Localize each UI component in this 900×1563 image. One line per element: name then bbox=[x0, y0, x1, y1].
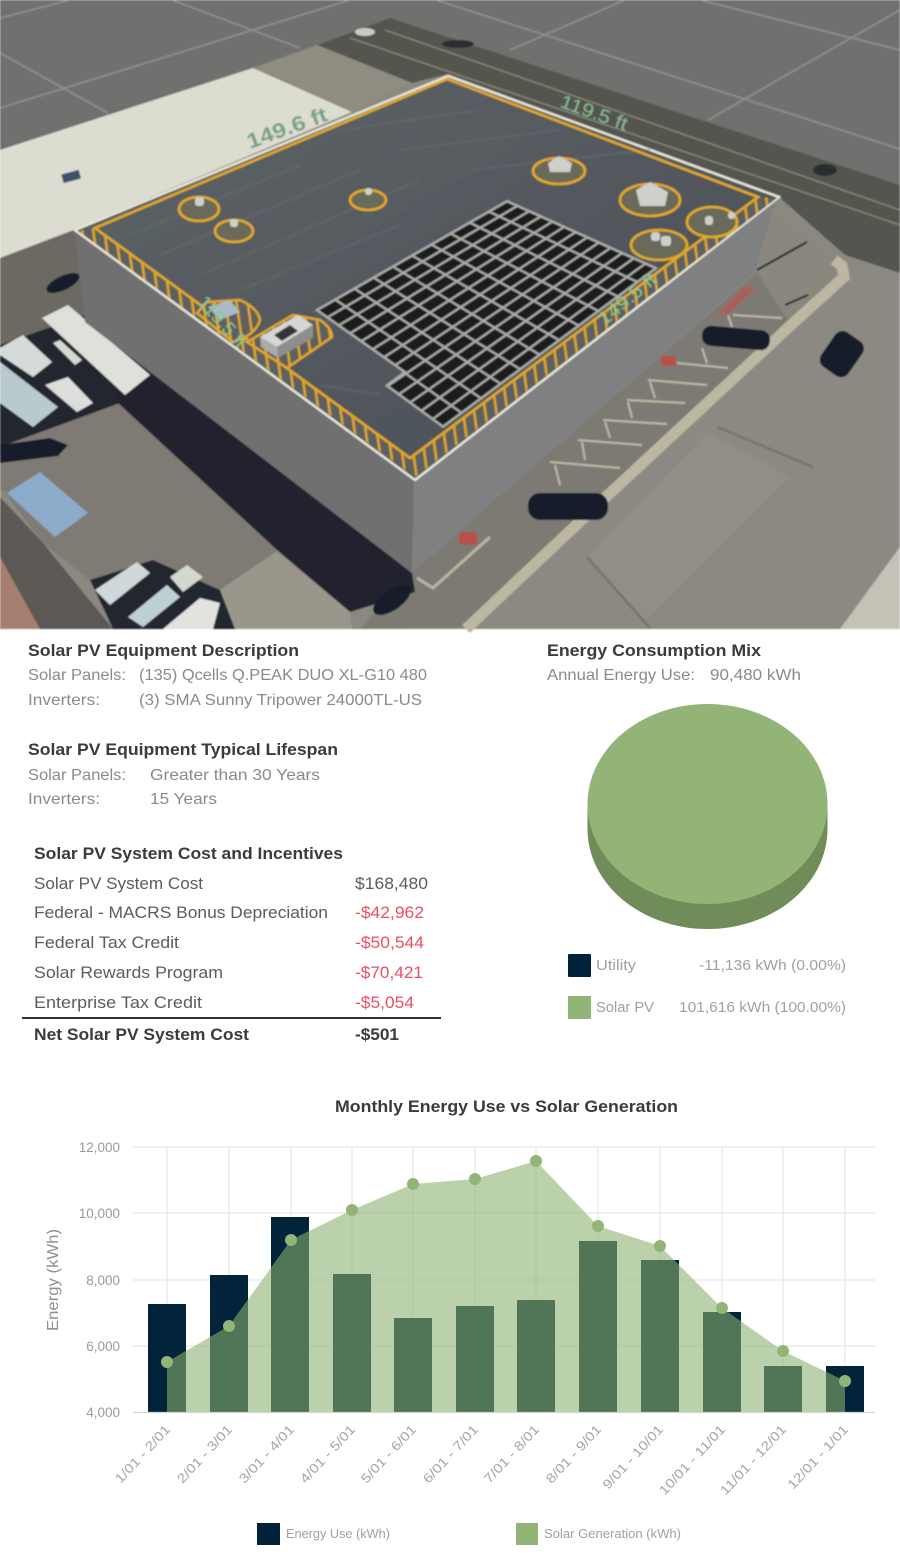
cost table: -$70,421 bbox=[355, 964, 423, 982]
x axis labels: 1/01 - 2/01 bbox=[112, 1422, 173, 1486]
ground base bbox=[0, 0, 900, 629]
equipment description rows bbox=[28, 667, 427, 709]
x axis labels bbox=[112, 1422, 851, 1498]
cost table: -$50,544 bbox=[355, 934, 424, 952]
red marks bbox=[717, 287, 757, 315]
solar panel array bbox=[296, 200, 658, 428]
roof setback hatch bbox=[78, 197, 777, 477]
pavement seams bbox=[587, 427, 813, 628]
roof dimension labels: 119.5 ft bbox=[193, 292, 251, 353]
light poles bbox=[757, 242, 808, 305]
street bbox=[317, 18, 900, 273]
heading: typical lifespan: Solar PV Equipment Typical Lifespan bbox=[28, 741, 338, 759]
lower right concrete bbox=[415, 225, 900, 629]
cost table: $168,480 bbox=[355, 875, 428, 893]
chart title: Monthly Energy Use vs Solar Generation bbox=[335, 1098, 678, 1116]
chart legend: Energy Use (kWh) bbox=[286, 1526, 390, 1541]
annual energy use: 90,480 kWh bbox=[710, 667, 801, 684]
y axis labels: 4,000 bbox=[86, 1405, 120, 1420]
dark drive bbox=[85, 315, 415, 612]
cost table: Solar PV System Cost bbox=[34, 875, 203, 893]
street cars bbox=[355, 28, 837, 176]
y axis labels: 12,000 bbox=[79, 1140, 120, 1155]
heading: equipment description: Solar PV Equipment Description bbox=[28, 642, 299, 660]
cost table: Federal - MACRS Bonus Depreciation bbox=[34, 904, 328, 922]
x axis labels: 6/01 - 7/01 bbox=[420, 1422, 481, 1486]
white vehicles and trailers bbox=[0, 305, 220, 629]
cars bbox=[0, 269, 867, 621]
neighbouring light roof bbox=[0, 68, 352, 258]
x axis labels: 3/01 - 4/01 bbox=[236, 1422, 297, 1486]
solar generation area bbox=[167, 1161, 845, 1412]
lifespan rows: Greater than 30 Years bbox=[150, 767, 320, 784]
parking strip bbox=[360, 272, 790, 629]
x axis labels: 10/01 - 11/01 bbox=[656, 1422, 728, 1498]
x axis labels: 4/01 - 5/01 bbox=[297, 1422, 358, 1486]
building right wall bbox=[412, 197, 779, 573]
roof bbox=[75, 76, 779, 480]
y axis labels: 6,000 bbox=[86, 1339, 120, 1354]
equipment description rows: (135) Qcells Q.PEAK DUO XL-G10 480 bbox=[139, 667, 427, 684]
x axis labels: 12/01 - 1/01 bbox=[784, 1422, 851, 1492]
building left wall bbox=[75, 232, 414, 573]
cost table: -$5,054 bbox=[355, 994, 414, 1012]
x axis labels: 11/01 - 12/01 bbox=[717, 1422, 789, 1498]
equipment description rows: (3) SMA Sunny Tripower 24000TL-US bbox=[139, 692, 422, 709]
x axis labels: 8/01 - 9/01 bbox=[543, 1422, 604, 1486]
pie legend: -11,136 kWh (0.00%) bbox=[699, 958, 846, 974]
equipment description rows: Inverters: bbox=[28, 692, 100, 709]
roof dimension labels: 119.5 ft bbox=[557, 92, 631, 136]
lifespan rows bbox=[28, 767, 320, 808]
cost table: Federal Tax Credit bbox=[34, 934, 179, 952]
x axis labels: 2/01 - 3/01 bbox=[174, 1422, 235, 1486]
equipment description rows: Solar Panels: bbox=[28, 667, 126, 684]
monthly energy chart bbox=[45, 1098, 875, 1545]
neighbouring ground left bbox=[0, 230, 85, 345]
small curb bbox=[417, 537, 490, 588]
lifespan rows: 15 Years bbox=[150, 791, 217, 808]
lifespan rows: Inverters: bbox=[28, 791, 100, 808]
left yard bbox=[0, 403, 277, 590]
cost table: Net Solar PV System Cost bbox=[34, 1026, 250, 1044]
y axis labels: 10,000 bbox=[79, 1206, 120, 1221]
lifespan rows: Solar Panels: bbox=[28, 767, 126, 784]
lower concrete bbox=[220, 552, 352, 629]
chart legend bbox=[257, 1523, 681, 1545]
y axis title: Energy (kWh) bbox=[45, 1229, 62, 1331]
annual energy use: Annual Energy Use: bbox=[547, 667, 695, 684]
cost table bbox=[22, 875, 441, 1044]
parking stall lines bbox=[550, 315, 782, 485]
blue skylight bbox=[7, 472, 88, 537]
y axis labels bbox=[79, 1140, 120, 1420]
pie legend: Utility bbox=[596, 958, 637, 974]
equipment and cost text bbox=[22, 642, 801, 1044]
cost table: Solar Rewards Program bbox=[34, 964, 223, 982]
pie legend: 101,616 kWh (100.00%) bbox=[679, 1000, 846, 1016]
heading: energy mix: Energy Consumption Mix bbox=[547, 642, 762, 660]
roof dimension labels: 149.5 ft bbox=[594, 269, 662, 330]
rooftop obstructions bbox=[179, 156, 737, 260]
lower-left strip bbox=[0, 497, 113, 629]
x axis labels: 5/01 - 6/01 bbox=[358, 1422, 419, 1486]
roof dimension labels: 149.6 ft bbox=[244, 103, 331, 154]
chart legend: Solar Generation (kWh) bbox=[544, 1526, 681, 1541]
pie legend: Solar PV bbox=[596, 1000, 654, 1016]
aerial photo of building rooftop bbox=[0, 0, 900, 629]
solar generation markers bbox=[161, 1155, 851, 1387]
x axis labels: 7/01 - 8/01 bbox=[481, 1422, 542, 1486]
roof dimension labels bbox=[193, 92, 662, 353]
y axis labels: 8,000 bbox=[86, 1273, 120, 1288]
blank map area with grid bbox=[0, 0, 900, 185]
pie chart bbox=[588, 704, 828, 929]
annual energy use bbox=[547, 667, 801, 684]
x axis labels: 9/01 - 10/01 bbox=[599, 1422, 666, 1492]
bars seen through the area bbox=[167, 1231, 845, 1412]
pie legend bbox=[568, 954, 846, 1019]
cost table: -$42,962 bbox=[355, 904, 424, 922]
roof membrane streaks bbox=[130, 110, 650, 395]
roof setback outline bbox=[95, 79, 758, 458]
heading: cost and incentives: Solar PV System Cost and Incentives bbox=[34, 845, 343, 863]
hatched rooftop units bbox=[197, 300, 332, 368]
cost table: -$501 bbox=[355, 1026, 399, 1044]
energy use bars bbox=[148, 1217, 864, 1412]
cost table: Enterprise Tax Credit bbox=[34, 994, 202, 1012]
sidewalk curb bbox=[466, 260, 844, 629]
